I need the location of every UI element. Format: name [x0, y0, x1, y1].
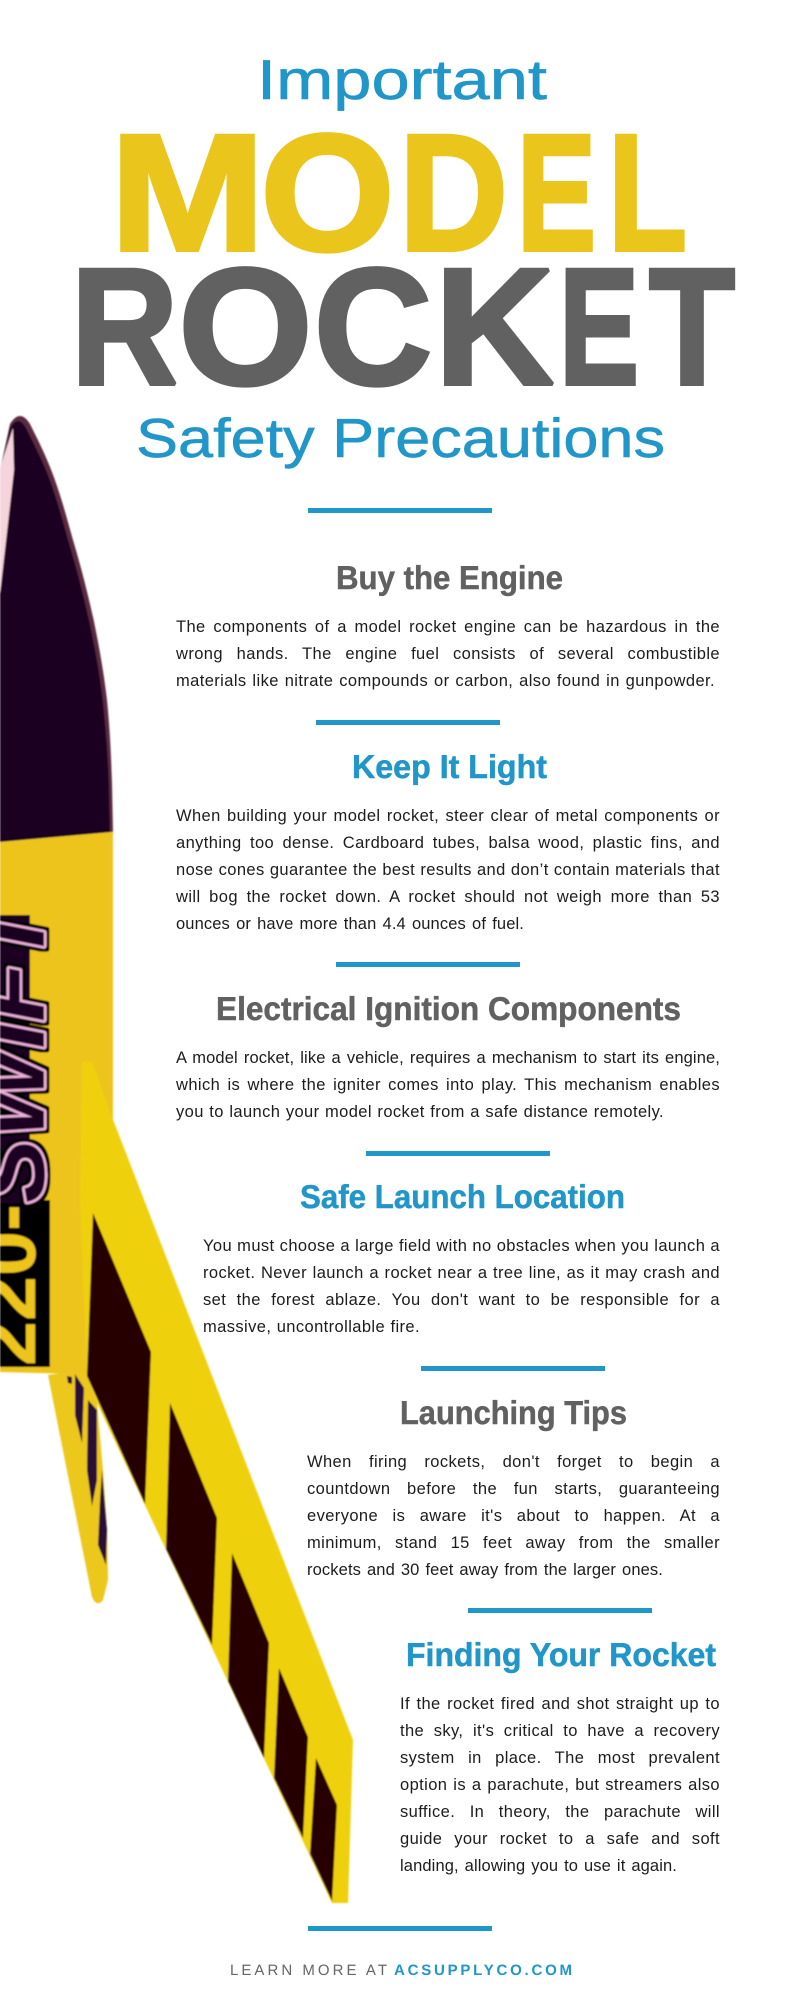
footer: learn more: ACSUPPLYCO.COM: [394, 1962, 572, 1979]
divider: [336, 962, 520, 967]
body text: rockets and 30 feet away from the larger ones.: [307, 1561, 663, 1579]
section: Safe Launch Location: [203, 1178, 720, 1336]
title: MODEL: D: [399, 101, 508, 286]
title: MODEL: O: [260, 101, 394, 286]
title: ROCKET: T: [649, 235, 735, 420]
title: ROCKET: K: [435, 235, 554, 420]
divider: [421, 1366, 605, 1371]
body text: materials like nitrate compounds or carbon, also found in gunpowder.: [176, 672, 715, 690]
illustration: yellow model rocket: [0, 415, 354, 1904]
footer: learn more: [230, 1962, 572, 1979]
footer: learn more: LEARN MORE AT: [230, 1962, 387, 1979]
body text: [176, 807, 720, 933]
body text: everyone is aware it's about to happen. At a: [307, 1507, 720, 1525]
heading: Keep It Light: [352, 748, 547, 785]
heading: Electrical Ignition Components: [216, 990, 681, 1027]
body text: guide your rocket to a safe and soft: [400, 1830, 720, 1848]
rocket small rear fin: [48, 1370, 108, 1603]
rocket label: 220-SWIFT: [0, 914, 52, 1368]
body text: When firing rockets, don't forget to begin a: [307, 1453, 720, 1471]
body text: suffice. In theory, the parachute will: [400, 1803, 720, 1821]
divider: [316, 720, 500, 725]
body text: landing, allowing you to use it again.: [400, 1857, 677, 1875]
title: Safety Precautions: Safety Precautions: [136, 407, 665, 469]
rocket body tube: [0, 832, 113, 1375]
title: ROCKET: R: [71, 235, 178, 420]
body text: will bog the rocket down. A rocket should not weigh more than 53: [176, 888, 720, 906]
nose highlight: [0, 428, 14, 594]
divider: [308, 508, 492, 513]
body text: The components of a model rocket engine can be hazardous in the: [176, 618, 720, 636]
body text: ounces or have more than 4.4 ounces of fuel.: [176, 915, 524, 933]
divider: [308, 1926, 492, 1931]
fin stripes: [87, 1213, 337, 1901]
title: ROCKET: O: [178, 235, 312, 420]
divider: [468, 1608, 652, 1613]
body text: rocket. Never launch a rocket near a tree line, as it may crash and: [203, 1264, 720, 1282]
body text: When building your model rocket, steer clear of metal components or: [176, 807, 720, 825]
title: MODEL: L: [608, 101, 687, 286]
body text: You must choose a large field with no obstacles when you launch a: [203, 1237, 720, 1255]
section: Electrical Ignition Components: [176, 990, 720, 1121]
rocket nose cone: [0, 416, 113, 842]
body text: anything too dense. Cardboard tubes, balsa wood, plastic fins, and: [176, 834, 720, 852]
heading: Buy the Engine: [336, 559, 563, 596]
title block: [71, 48, 736, 469]
body text: the sky, it's critical to have a recovery: [400, 1722, 720, 1740]
title: ROCKET: C: [314, 235, 432, 420]
title: MODEL: M: [110, 101, 265, 286]
heading: Launching Tips: [400, 1394, 627, 1431]
body text: [307, 1453, 720, 1579]
body text: [400, 1695, 720, 1875]
body text: minimum, stand 15 feet away from the smaller: [307, 1534, 720, 1552]
body text: which is where the igniter comes into play. This mechanism enables: [176, 1076, 720, 1094]
body text: nose cones guarantee the best results and don’t contain materials that: [176, 861, 720, 879]
body text: [203, 1237, 720, 1336]
body text: system in place. The most prevalent: [400, 1749, 720, 1767]
heading: Safe Launch Location: [300, 1178, 625, 1215]
body text: [176, 618, 720, 690]
body text: set the forest ablaze. You don't want to be responsible for a: [203, 1291, 720, 1309]
body text: [176, 1049, 720, 1121]
body text: you to launch your model rocket from a safe distance remotely.: [176, 1103, 664, 1121]
section: Keep It Light: [176, 748, 720, 933]
divider: [366, 1151, 550, 1156]
body text: If the rocket fired and shot straight up to: [400, 1695, 720, 1713]
title: ROCKET: E: [559, 235, 639, 420]
heading: Finding Your Rocket: [406, 1636, 716, 1673]
body text: option is a parachute, but streamers also: [400, 1776, 720, 1794]
section: Finding Your Rocket: [400, 1636, 720, 1875]
section: Launching Tips: [307, 1394, 720, 1579]
body text: massive, uncontrollable fire.: [203, 1318, 420, 1336]
body text: countdown before the fun starts, guaranteeing: [307, 1480, 720, 1498]
rocket large fin: [80, 1062, 353, 1903]
title: Important: Important: [257, 48, 548, 111]
body text: wrong hands. The engine fuel consists of several combustible: [176, 645, 720, 663]
body text: A model rocket, like a vehicle, requires a mechanism to start its engine,: [176, 1049, 720, 1067]
section: Buy the Engine: [176, 559, 720, 690]
title: MODEL: E: [517, 101, 596, 286]
